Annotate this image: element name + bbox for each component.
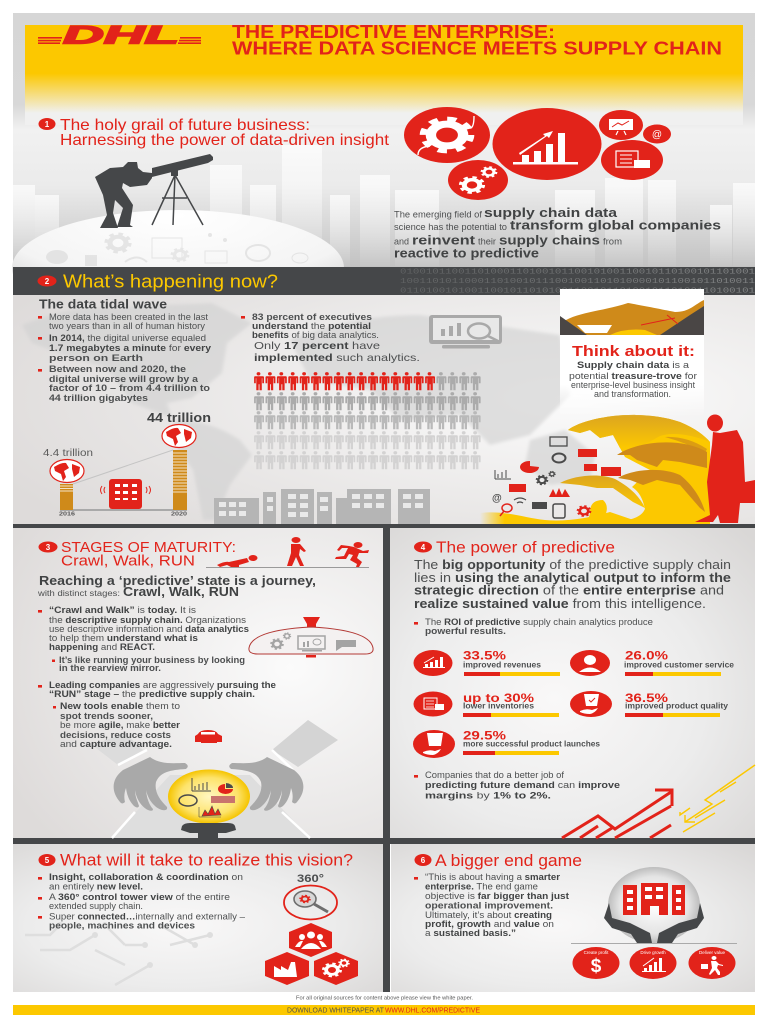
text block: 83 percent of executives: 83 percent of executives [252, 312, 372, 322]
text block: stages of maturity: decisions, reduce costs [60, 730, 171, 740]
text block: supply chain data intro: their [478, 236, 496, 246]
text block: 83 percent of executives: implemented such analytics. [254, 352, 420, 364]
text block: end game quote: enterprise. The end game [425, 882, 538, 892]
heading: section 1 [38, 117, 390, 149]
icon: deliver value: Deliver value [699, 950, 726, 955]
text block: stages of maturity: the descriptive supply chain. Organizations [49, 615, 247, 625]
icon: 360 degree control tower and hexagons [265, 873, 358, 985]
chart: data growth 2016 to 2020: 44 trillion [147, 410, 211, 425]
text block: big opportunity [414, 558, 731, 611]
text block: end game quote: profit, growth and value on [425, 919, 554, 929]
panel: header and section 1 background [13, 13, 755, 267]
stat: improved revenues 33.5%: 33.5% [463, 648, 506, 662]
icon: 360 degree control tower and hexagons: 360° [297, 873, 324, 885]
text block: vision bullets: extended supply chain. [49, 901, 143, 911]
panel: section 4 background [390, 528, 755, 838]
panel dividers [13, 524, 755, 992]
text block: the data tidal wave: Between now and 2020, the [49, 364, 186, 374]
text block: stages of maturity: New tools enable them to [60, 701, 180, 711]
text block: supply chain data intro: and [394, 236, 409, 246]
text block: stages of maturity [37, 574, 316, 749]
text block: 83 percent of executives [241, 312, 420, 364]
chart: data growth 2016 to 2020 [43, 410, 211, 518]
text block: the data tidal wave: The data tidal wave [39, 296, 167, 312]
text block: ROI bullet: powerful results. [425, 626, 506, 636]
icon: monitor with magnifier [429, 315, 502, 348]
text block: supply chain data intro: supply chain data [484, 205, 618, 220]
text block: stages of maturity: “Crawl and Walk” is today. It is [49, 605, 197, 615]
text block: stages of maturity: with distinct stages: [37, 589, 120, 598]
text block: big opportunity: lies in using the analytical output to inform the [414, 571, 731, 585]
heading band: what's happening now: What’s happening now? [63, 272, 278, 292]
illustration: wave of data with icons and businessman: @ [492, 493, 502, 504]
heading: the power of predictive: The power of predictive [436, 540, 615, 556]
stat: improved customer service 26.0%: improved customer service [624, 660, 735, 670]
panel: think about it: enterprise-level business insight [571, 380, 695, 390]
text block: vision bullets: people, machines and devices [49, 920, 195, 930]
panel: section 3 background [13, 528, 383, 838]
stat: improved customer service 26.0%: 26.0% [625, 648, 668, 662]
icon: create profit: Create profit [584, 950, 609, 955]
panel: think about it: and transformation. [594, 389, 671, 399]
text block: stages of maturity: It’s like running your business by looking [59, 655, 245, 665]
footnote: For all original sources for content above please view the white paper. [296, 996, 473, 1002]
illustration: hands holding building [571, 867, 737, 944]
heading band: what's happening now: 0100101100110100011010010110010100110010110100101101001 [400, 268, 755, 276]
heading: what will it take: 5 [45, 856, 50, 865]
illustration: person with telescope on dome [12, 154, 344, 326]
stat: more successful product launches 29.5%: more successful product launches [463, 740, 601, 748]
text block: stages of maturity: be more agile, make better [60, 720, 181, 730]
heading: section 1: The holy grail of future business: [60, 117, 310, 134]
heading: stages of maturity: STAGES OF MATURITY: [61, 540, 236, 556]
arrow: yellow lightning arrows [680, 765, 755, 832]
text block: end game quote: a sustained basis.” [425, 928, 516, 938]
text block: end game quote [414, 872, 569, 938]
chart: data growth 2016 to 2020: 2016 [59, 512, 75, 518]
text block: stages of maturity: “RUN” stage – the predictive supply chain. [49, 689, 255, 699]
text block: the data tidal wave: person on Earth [49, 353, 143, 363]
logo: DHL: DHL [63, 22, 179, 50]
text block: supply chain data intro: supply chains [499, 232, 600, 248]
text block: improve margins [414, 770, 620, 800]
text block: ROI bullet: The ROI of predictive supply chain analytics produce [425, 617, 653, 627]
text block: 83 percent of executives: Only 17 percent have [254, 340, 380, 352]
chart: pictogram of people, 17 percent implemented [254, 372, 481, 469]
chart: data growth 2016 to 2020: 4.4 trillion [43, 448, 93, 459]
text block: end game quote: “This is about having a smarter [425, 872, 561, 882]
panel: think about it: potential treasure-trove for [569, 371, 697, 382]
text block: supply chain data intro: from [603, 236, 622, 246]
text block: end game quote: objective is far bigger than just [425, 891, 569, 901]
panel: think about it: Supply chain data is a [577, 360, 690, 371]
text block: supply chain data intro: reinvent [412, 232, 476, 248]
text block: supply chain data intro: transform global companies [510, 218, 721, 232]
illustration: hands around crystal ball [112, 750, 310, 838]
arrow: red zigzag growth arrow [562, 790, 672, 838]
stat: improved product quality 36.5% [570, 691, 729, 717]
heading band: what's happening now: 2 [45, 277, 50, 286]
text block: stages of maturity: Leading companies are aggressively pursuing the [49, 680, 276, 690]
stat: lower inventories up to 30%: up to 30% [463, 691, 534, 705]
text block: 83 percent of executives: understand the potential [252, 321, 371, 331]
icons: red circle cluster: @ [652, 130, 662, 140]
icons: red circle cluster [404, 107, 671, 200]
text block: the data tidal wave: digital universe will grow by a [49, 374, 199, 384]
text block: improve margins: predicting future demand can improve [425, 780, 620, 790]
heading: section 1: Harnessing the power of data-driven insight [60, 132, 390, 149]
text block: big opportunity: strategic direction of the entire enterprise and [414, 584, 724, 598]
text block: end game quote: operational improvement. [425, 900, 553, 910]
text block: big opportunity: realize sustained value from this intelligence. [414, 597, 706, 611]
heading: section 1: 1 [45, 120, 50, 129]
text block: the data tidal wave: More data has been created in the last [49, 312, 209, 322]
stat: lower inventories up to 30% [414, 691, 559, 717]
heading band: what's happening now: 0110100101001100101101010011001011010010110100110100101 [400, 288, 755, 296]
heading: a bigger end game: 6 [421, 856, 426, 865]
text block: vision bullets [38, 872, 245, 930]
icon: create profit [572, 947, 620, 979]
icon: rearview mirror [249, 617, 373, 658]
text block: supply chain data intro: reactive to predictive [394, 246, 539, 260]
text block: end game quote: Ultimately, it’s about creating [425, 910, 552, 920]
text block: supply chain data intro: The emerging field of [394, 210, 483, 220]
heading: stages of maturity: 3 [46, 543, 51, 552]
heading: the power of predictive: 4 [421, 543, 426, 552]
text block: vision bullets: Super connected… internally and externally – [49, 912, 245, 922]
heading: what will it take: What will it take to realize this vision? [60, 852, 353, 870]
title: WHERE DATA SCIENCE MEETS SUPPLY CHAIN [232, 38, 722, 58]
text block: supply chain data intro [394, 205, 721, 260]
chart: data growth 2016 to 2020: 2020 [171, 512, 187, 518]
stat: improved product quality 36.5%: improved product quality [625, 702, 729, 710]
text block: the data tidal wave: 1.7 megabytes a minute for every [49, 343, 211, 353]
heading: a bigger end game: A bigger end game [435, 852, 582, 870]
title [232, 22, 722, 58]
footer: download whitepaper bar: WWW.DHL.COM/PREDICTIVE [385, 1006, 480, 1014]
text block: the data tidal wave: two years than in all of human history [49, 321, 206, 331]
text block: vision bullets: an entirely new level. [49, 882, 143, 892]
text block: 83 percent of executives: benefits of big data analytics. [252, 330, 379, 340]
text block: improve margins: Companies that do a better job of [425, 770, 565, 780]
text block: improve margins: margins by 1% to 2%. [425, 790, 551, 800]
stat: improved customer service 26.0% [570, 648, 735, 676]
text block: stages of maturity: to help them understand what is [49, 633, 198, 643]
panel: section 6 background [391, 844, 755, 992]
title: THE PREDICTIVE ENTERPRISE: [232, 22, 555, 42]
text block: the data tidal wave: 44 trillion gigabytes [49, 393, 148, 403]
text block: stages of maturity: Crawl, Walk, RUN [123, 585, 239, 599]
panel: section 5 background [13, 844, 383, 992]
stat: more successful product launches 29.5%: 29.5% [463, 728, 506, 742]
stat: more successful product launches 29.5% [413, 728, 601, 758]
stat: improved revenues 33.5% [414, 648, 560, 676]
stat: improved revenues 33.5%: improved revenues [463, 660, 542, 670]
footer: download whitepaper bar [13, 1005, 755, 1015]
text block: supply chain data intro: science has the potential to [394, 222, 507, 232]
text block: stages of maturity: use descriptive information and data analytics [49, 624, 249, 634]
heading: stages of maturity [38, 540, 236, 570]
text block: vision bullets: Insight, collaboration & coordination on [49, 872, 243, 882]
text block: stages of maturity: happening and REACT. [49, 642, 155, 652]
text block: the data tidal wave: In 2014, the digital universe equaled [49, 333, 206, 343]
icon: red car [195, 730, 222, 743]
illustration: wave of data with icons and businessman [480, 414, 755, 524]
icon: drive growth [630, 947, 676, 979]
footer: download whitepaper bar: DOWNLOAD WHITEPAPER AT [287, 1006, 384, 1014]
text block: the data tidal wave: factor of 10 – from 4.4 trillion to [49, 383, 211, 393]
panel: section 2 background with world map [13, 295, 755, 524]
text block: stages of maturity: in the rearview mirror. [59, 663, 161, 673]
icons: crawl, walk, run figures [206, 537, 369, 568]
text block: stages of maturity: and capture advantage. [60, 739, 172, 749]
text block: the data tidal wave [38, 296, 211, 403]
text block: stages of maturity: Reaching a ‘predictive’ state is a journey, [39, 574, 316, 588]
heading band: what's happening now [13, 267, 755, 296]
text block: ROI bullet [414, 617, 653, 636]
heading band: what's happening now: 1001101011000110100101110010011010100001011001011010011 [400, 278, 755, 286]
icon: deliver value [688, 947, 736, 979]
text block: big opportunity: The big opportunity of the predictive supply chain [414, 558, 731, 572]
illustration: gray city buildings [214, 489, 430, 524]
text block: stages of maturity: spot trends sooner, [60, 711, 153, 721]
icon: create profit: $ [591, 956, 602, 977]
icon: drive growth: Drive growth [640, 950, 666, 955]
panel: think about it: Think about it: [572, 343, 695, 360]
text block: vision bullets: A 360° control tower view of the entire [49, 892, 230, 902]
panel: think about it [560, 289, 704, 417]
stat: lower inventories up to 30%: lower inventories [463, 702, 535, 710]
heading: stages of maturity: Crawl, Walk, RUN [61, 554, 195, 570]
stat: improved product quality 36.5%: 36.5% [625, 691, 668, 705]
